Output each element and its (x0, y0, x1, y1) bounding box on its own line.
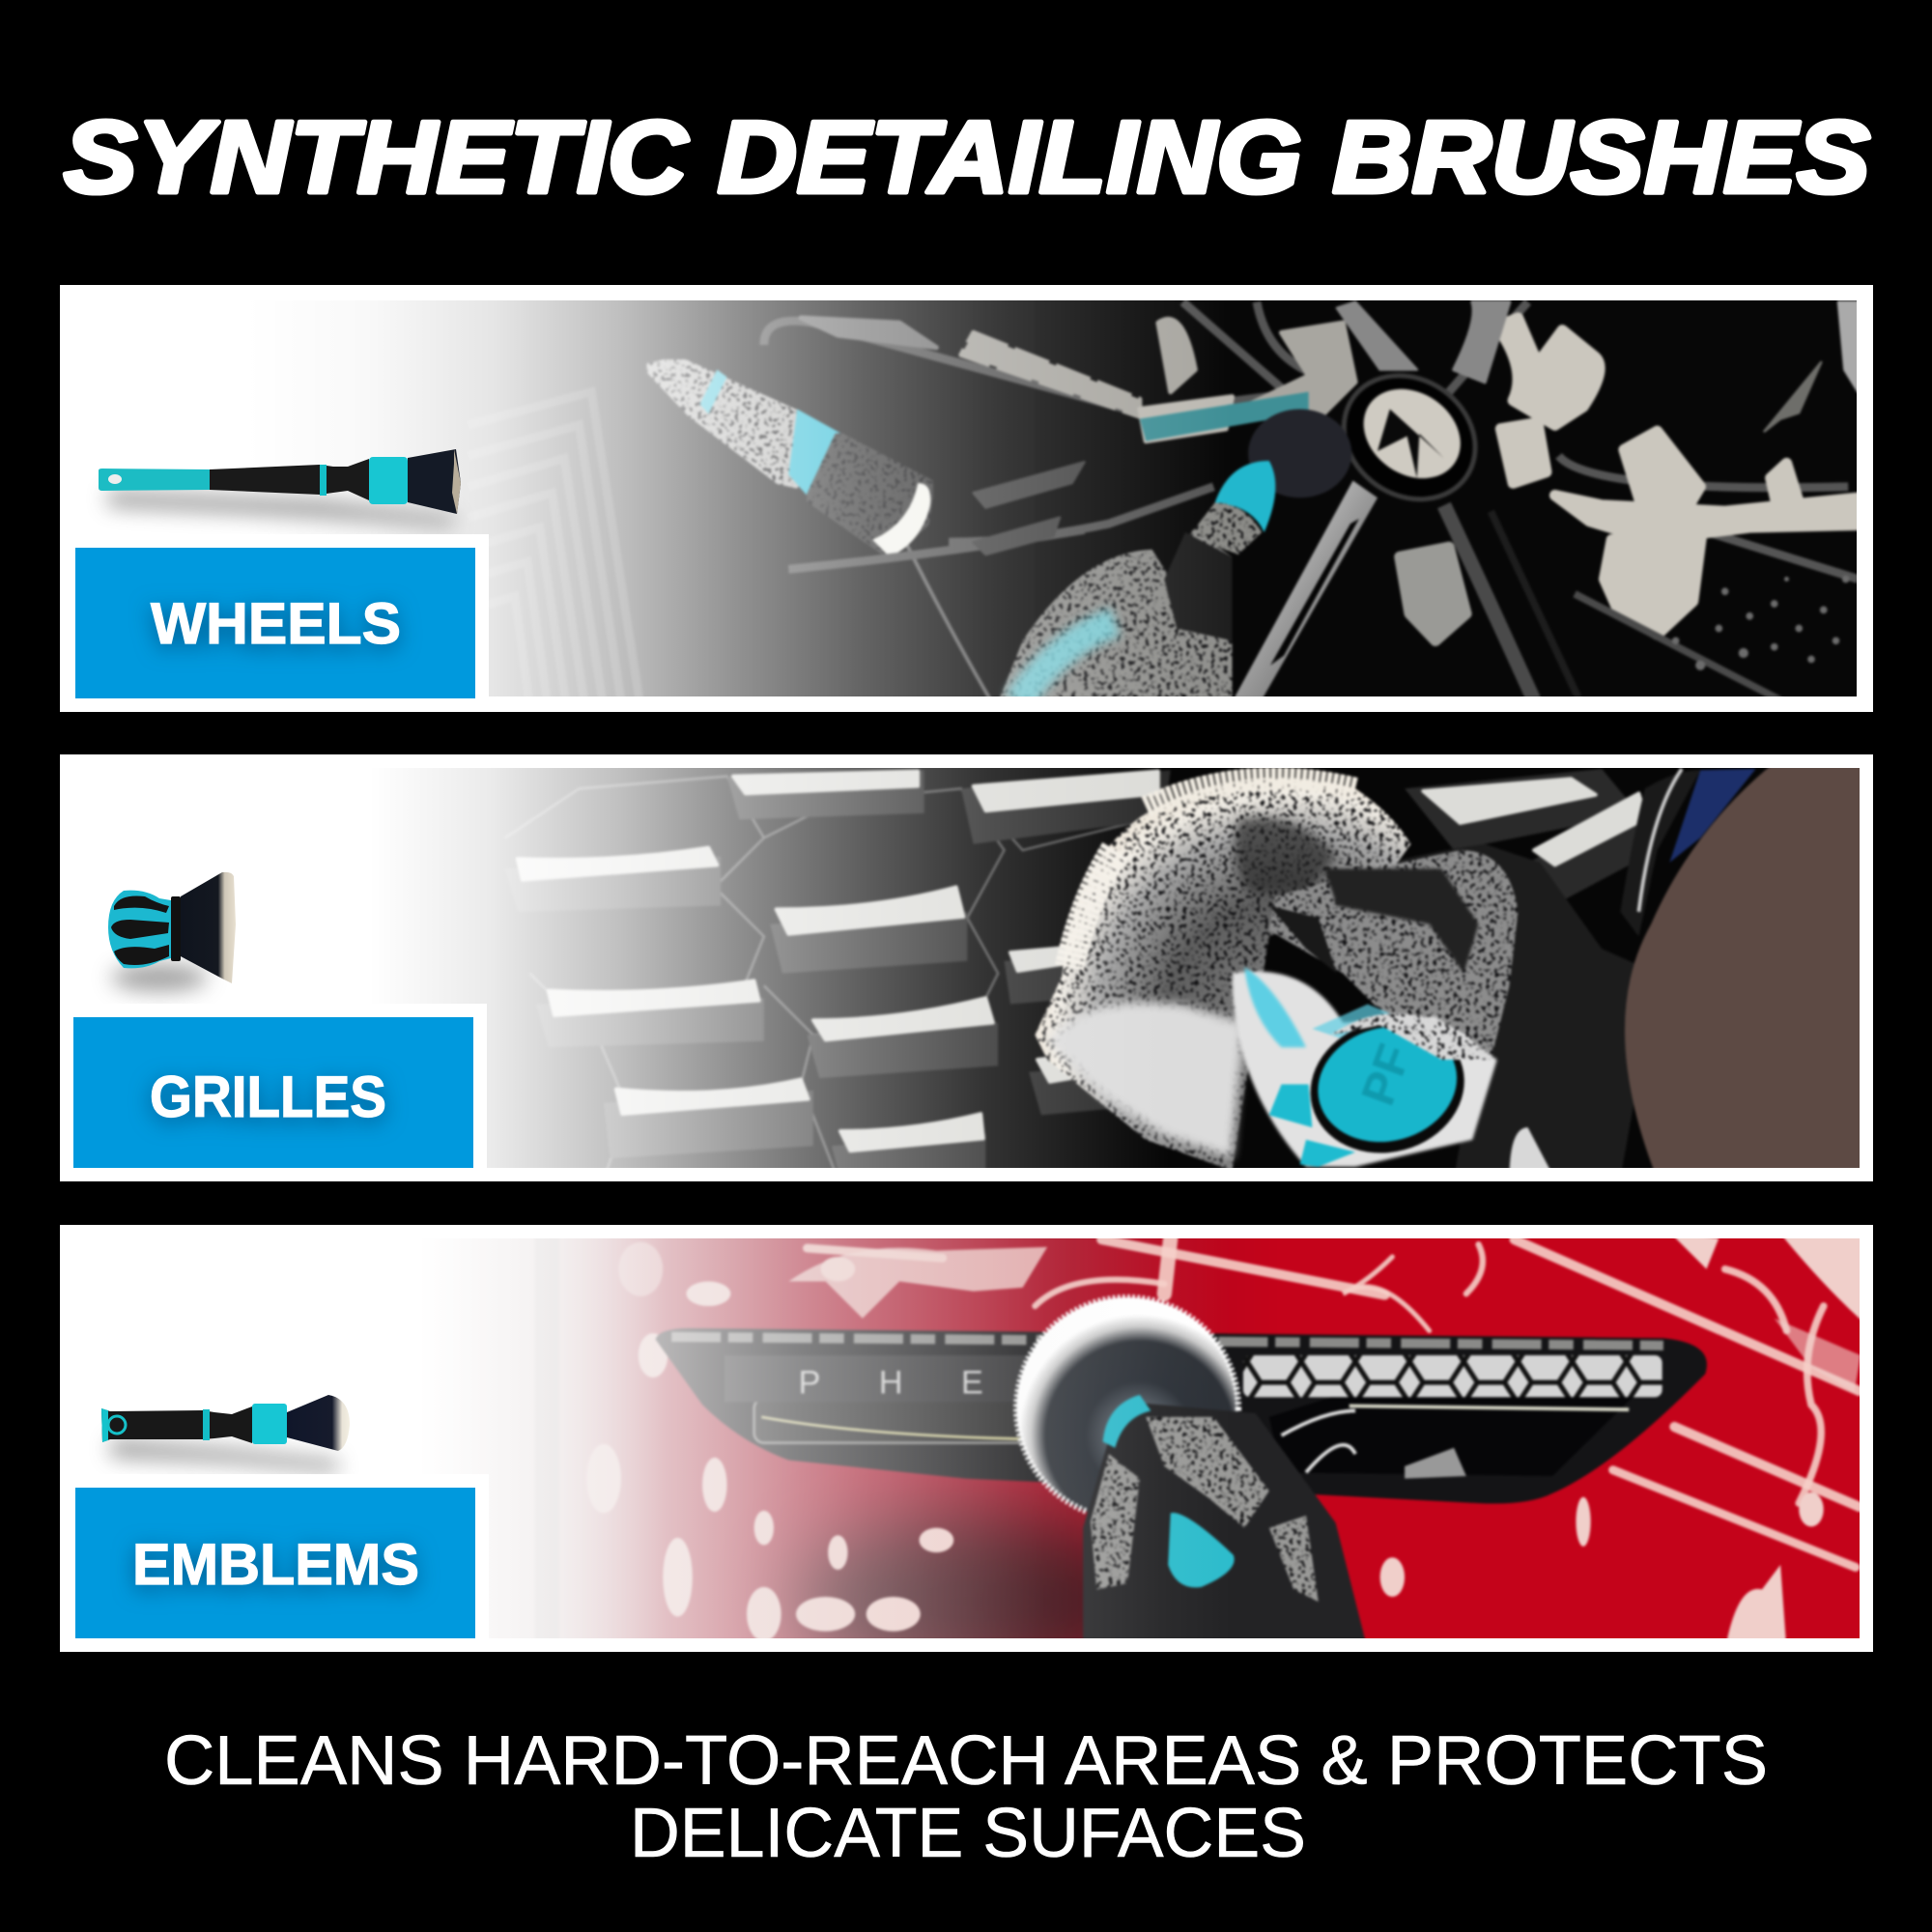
icon: medium-handled brush (101, 1395, 350, 1472)
icon: short-handled brush (108, 872, 236, 991)
panel: emblems (49, 1225, 1873, 1688)
label: grilles: GRILLES (150, 1065, 386, 1129)
caption (164, 1722, 1768, 1872)
label: emblems: EMBLEMS (132, 1532, 419, 1597)
label: wheels (60, 534, 489, 712)
photo: brush cleaning a foamy honeycomb grille (418, 768, 1860, 1168)
panel: wheels (49, 285, 1873, 712)
icon: long-handled brush (99, 449, 461, 526)
photo: brush cleaning a foamy emblem on a red car: PHE (799, 1365, 983, 1402)
panel: grilles (49, 754, 1873, 1181)
label: grilles (60, 1004, 487, 1181)
caption: CLEANS HARD-TO-REACH AREAS & PROTECTS (164, 1722, 1768, 1800)
title: SYNTHETIC DETAILING BRUSHES (64, 100, 1870, 214)
photo: brushes cleaning a foamy black wheel (382, 300, 1857, 696)
photo: brush cleaning a foamy honeycomb grille: PF (1351, 1037, 1421, 1112)
photo: brush cleaning a foamy emblem on a red car (495, 1238, 1860, 1638)
label: emblems (60, 1474, 489, 1652)
label: wheels: WHEELS (151, 591, 401, 656)
caption: DELICATE SUFACES (630, 1795, 1306, 1872)
